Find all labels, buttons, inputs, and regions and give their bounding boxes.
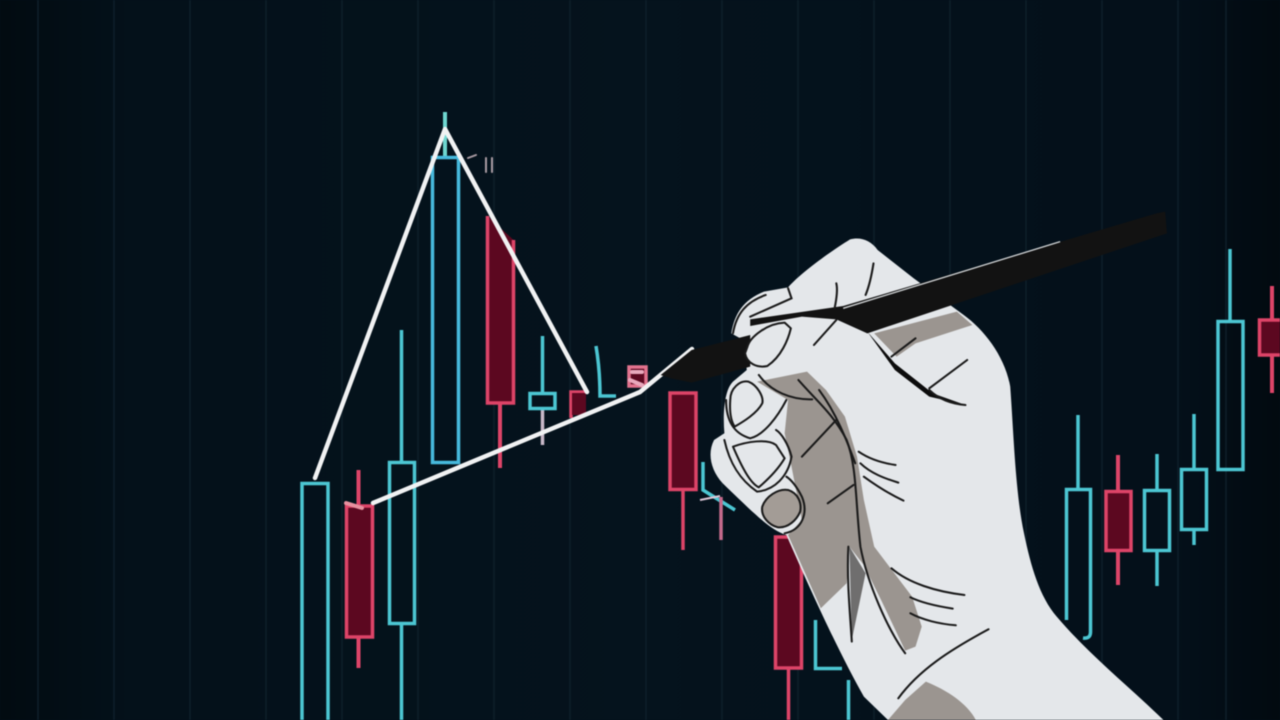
palm shadow	[757, 372, 922, 651]
candle 1 teal	[302, 484, 328, 720]
hand silhouette	[711, 238, 1163, 720]
small scribble marks	[468, 155, 492, 172]
index fingertip	[745, 323, 791, 367]
candlesticks left cluster	[302, 112, 848, 720]
shadow streak under pen	[867, 332, 965, 405]
candle 19 teal	[1218, 249, 1243, 470]
hand-drawn white pattern lines	[315, 129, 692, 508]
candle 15 teal	[1066, 415, 1090, 638]
candle 5 red	[488, 216, 514, 468]
candle 6 teal small	[530, 336, 555, 445]
crease lines	[724, 263, 989, 698]
rising trend line	[373, 349, 692, 503]
pen barrel	[750, 212, 1167, 333]
candle 4 blue	[432, 112, 458, 462]
ring fingernail	[733, 441, 785, 487]
dark shadow wedge	[849, 547, 866, 640]
candle 9 red with tall wick	[629, 193, 646, 386]
middle fingernail	[730, 381, 763, 427]
candle 20 red	[1260, 286, 1280, 393]
candle 2 red	[346, 470, 372, 668]
pen tip	[661, 335, 750, 383]
candle 16 red	[1106, 455, 1131, 585]
fingers	[730, 323, 801, 527]
candle 11 partly hidden	[700, 462, 735, 540]
pen highlight	[843, 242, 1060, 308]
candlesticks right cluster	[1066, 249, 1280, 638]
candle 7 red small	[571, 392, 586, 418]
candle 10 red	[670, 393, 696, 550]
candle 13 teal behind wrist	[816, 620, 848, 720]
little fingernail	[762, 490, 801, 527]
hand holding pen	[661, 212, 1167, 720]
candle 18 teal	[1182, 414, 1206, 545]
peak triangle line	[315, 129, 587, 478]
candle 3 teal	[390, 330, 414, 720]
back shadow under pen	[874, 312, 972, 357]
candle 12 red	[776, 537, 802, 720]
wrist shadow	[888, 682, 976, 720]
candle 8 teal curved	[596, 346, 616, 396]
candle 17 teal	[1144, 454, 1170, 586]
